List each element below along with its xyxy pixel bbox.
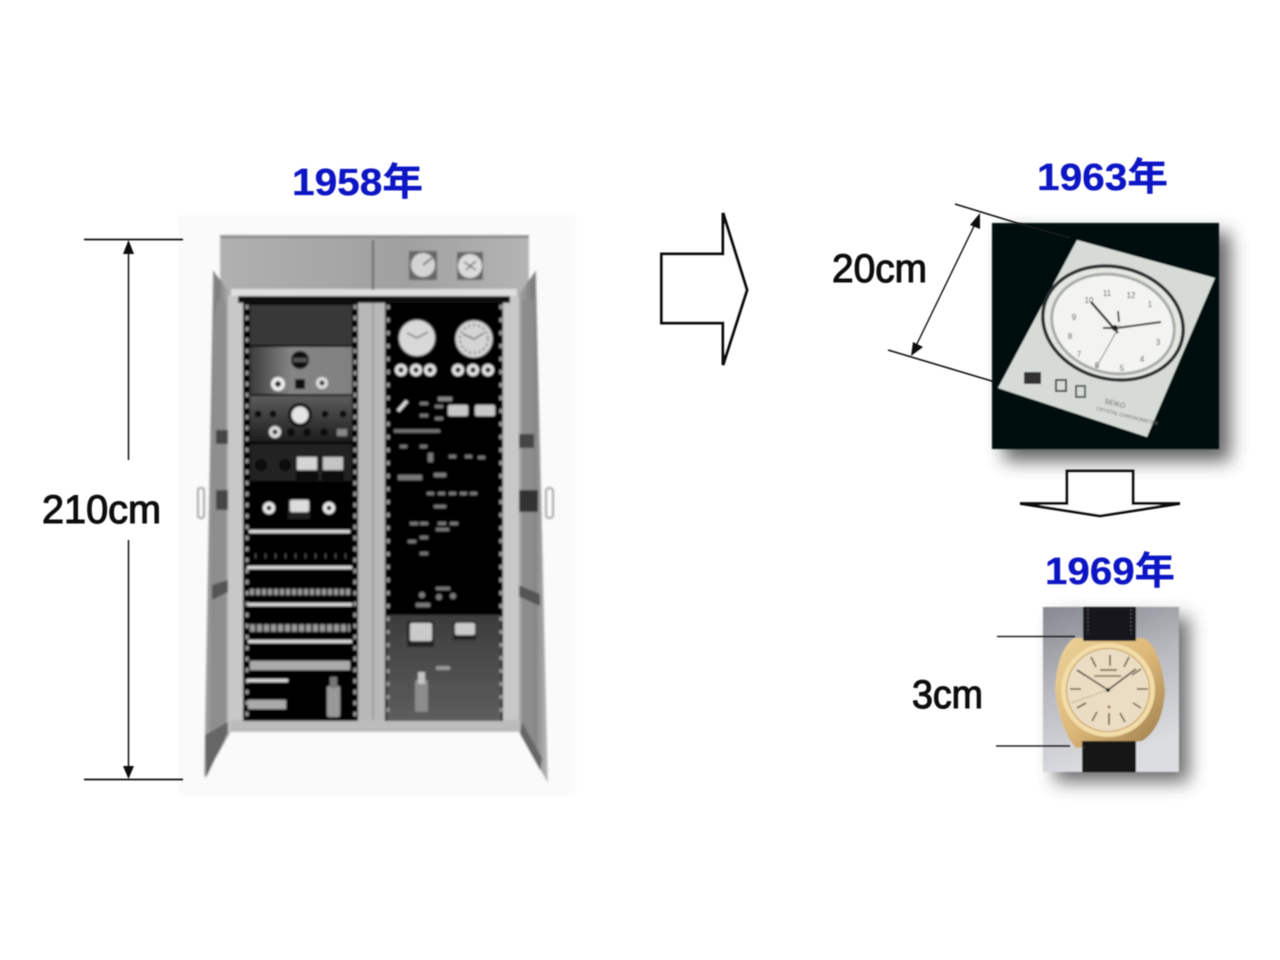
clock dial: 12 xyxy=(1127,291,1136,300)
label 210cm: 210cm xyxy=(42,488,161,532)
clock dial: 7 xyxy=(1077,350,1082,359)
clock dial xyxy=(1031,251,1195,395)
left door xyxy=(204,270,232,778)
clock dial: 11 xyxy=(1103,289,1112,298)
label 20cm: 20cm xyxy=(832,247,927,291)
strap xyxy=(1083,607,1136,643)
right rack xyxy=(385,303,503,721)
clock dial: 6 xyxy=(1095,361,1100,370)
cabinet header with two clocks xyxy=(220,235,529,299)
year label 1963: 1963年 xyxy=(1037,157,1168,199)
left rack xyxy=(243,303,358,721)
case xyxy=(1055,638,1165,748)
arrow: down xyxy=(1020,471,1180,516)
dimension: 3cm lines xyxy=(996,636,1075,746)
year label 1969: 1969年 xyxy=(1045,551,1175,593)
plate xyxy=(998,240,1215,437)
arrow: large right xyxy=(662,213,747,365)
photo: 1963 portable crystal chronometer xyxy=(992,223,1230,461)
clock dial: 4 xyxy=(1140,355,1145,364)
plate logos and text: CRYSTAL CHRONOMETER xyxy=(1096,406,1159,427)
dimension: 20cm diagonal xyxy=(888,204,1070,382)
clock dial: 9 xyxy=(1072,313,1077,322)
clock dial: 10 xyxy=(1085,296,1094,305)
clock dial: 8 xyxy=(1068,332,1073,341)
plate logos and text xyxy=(1024,372,1159,427)
clock dial: 5 xyxy=(1120,364,1125,373)
frame xyxy=(228,296,244,732)
right door xyxy=(518,270,548,783)
plate logos and text: SEIKO xyxy=(1104,398,1127,410)
label 3cm: 3cm xyxy=(912,673,983,717)
clock dial: 3 xyxy=(1156,338,1161,347)
year label 1958: 1958年 xyxy=(292,162,423,204)
photo: 1958 crystal clock cabinet xyxy=(178,215,576,795)
photo: 1969 quartz wristwatch xyxy=(1043,607,1189,782)
clock dial: 1 xyxy=(1148,300,1153,309)
dimension: 210cm height xyxy=(84,240,183,780)
dial xyxy=(1061,643,1155,737)
